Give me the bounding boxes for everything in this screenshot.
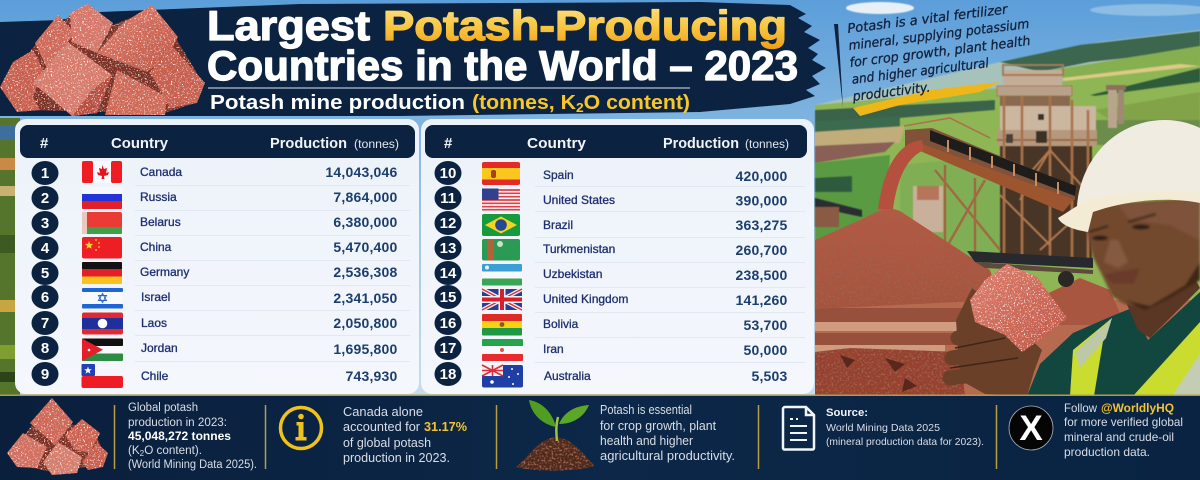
row 2 Russia: 7,864,000 (333, 189, 398, 205)
row 7 Laos: Laos (141, 316, 167, 330)
row 4 China: China (140, 240, 172, 254)
row 15 United Kingdom: United Kingdom (543, 292, 628, 306)
text: global production: production in 2023: (128, 417, 227, 429)
callout: potash description (834, 0, 1036, 116)
row 8 Jordan: 1,695,800 (333, 341, 398, 357)
text: potash essential: agricultural productivity. (600, 449, 735, 463)
row 15 United Kingdom: 141,260 (735, 292, 788, 308)
row 4 China: 4 (41, 240, 50, 257)
processing plant tower (997, 65, 1126, 262)
row 6 Israel (32, 285, 398, 309)
text: source (826, 407, 984, 448)
row 13 Turkmenistan: 260,700 (735, 242, 788, 258)
row 10 Spain: 420,000 (735, 168, 788, 184)
text: source: Source: (826, 407, 868, 419)
row 10 Spain (434, 161, 788, 185)
row 4 China: 5,470,400 (333, 239, 398, 255)
potash rock held in hand (970, 264, 1067, 352)
row 11 United States: United States (543, 193, 615, 207)
farmland strip left of the table (0, 118, 20, 398)
row 12 Brazil: 12 (440, 215, 456, 232)
icon: potash rock pile in header (0, 4, 205, 116)
subtitle: 2 (576, 100, 584, 115)
text: source: (mineral production data for 2023). (826, 436, 984, 448)
row 12 Brazil: 363,275 (735, 217, 788, 233)
row 15 United Kingdom: 15 (440, 289, 456, 306)
row 5 Germany: Germany (140, 265, 189, 279)
row 6 Israel: 6 (41, 289, 49, 306)
row 5 Germany (32, 261, 398, 285)
row 17 Iran (434, 336, 788, 361)
title (207, 2, 798, 89)
row 13 Turkmenistan: 13 (440, 240, 456, 257)
icon: seedling in soil (516, 400, 595, 471)
text: Canada share: 31.17% (424, 419, 467, 434)
text: potash essential: Potash is essential (600, 403, 692, 417)
row 10 Spain: Spain (543, 168, 574, 182)
icon: source document (783, 407, 814, 450)
worker hand (950, 288, 1042, 396)
left table header: # (40, 135, 49, 152)
row 15 United Kingdom (434, 285, 788, 310)
row 14 Uzbekistan (434, 261, 788, 286)
row 10 Spain: 10 (440, 165, 456, 182)
text: global production (128, 402, 257, 471)
row 8 Jordan: 8 (41, 340, 49, 357)
row 12 Brazil: Brazil (543, 218, 573, 232)
text: global production: O content). (144, 445, 202, 457)
right table header: Country (527, 135, 587, 152)
row 7 Laos: 2,050,800 (333, 315, 398, 331)
row 18 Australia: 5,503 (751, 368, 788, 384)
panel: left table (15, 119, 419, 394)
text: potash essential: for crop growth, plant (600, 419, 717, 433)
row 8 Jordan (32, 336, 398, 361)
text: global production: Global potash (128, 402, 198, 414)
left table header: Country (111, 135, 169, 152)
text: global production: 2 (140, 449, 145, 458)
row 16 Bolivia: 53,700 (743, 317, 788, 333)
title: Potash-Producing (383, 2, 787, 49)
subtitle: O content) (584, 92, 690, 114)
text: follow: Follow (1064, 401, 1097, 415)
row 16 Bolivia: 16 (440, 315, 456, 332)
worker face (1086, 198, 1200, 310)
text: global production: 45,048,272 tonnes (128, 431, 231, 443)
text: Canada share: production in 2023. (343, 450, 450, 465)
text: Canada share: Canada alone (343, 404, 423, 419)
row 16 Bolivia (434, 311, 788, 336)
row 5 Germany: 5 (41, 265, 49, 282)
row 3 Belarus: 6,380,000 (333, 214, 398, 230)
text: global production: (World Mining Data 2025). (128, 459, 257, 471)
worker shirt (1027, 292, 1200, 396)
subtitle: Potash mine production (210, 92, 465, 114)
panel: footer bar (0, 394, 1200, 480)
text: follow: for more verified global (1064, 415, 1183, 429)
title: Largest (207, 2, 370, 49)
worker hi-vis vest (1070, 318, 1200, 396)
row 6 Israel: 2,341,050 (333, 290, 398, 306)
row 4 China (32, 236, 398, 260)
row 3 Belarus: 3 (41, 215, 49, 232)
row 9 Chile: 9 (41, 366, 49, 383)
inclined conveyor belt (904, 118, 1076, 262)
subtitle (208, 88, 690, 115)
icon: X logo (1009, 406, 1053, 450)
text: source: World Mining Data 2025 (826, 422, 940, 434)
text: follow: mineral and crude-oil (1064, 430, 1174, 444)
text: follow (1064, 401, 1183, 459)
row 7 Laos (32, 311, 398, 335)
row 11 United States: 390,000 (735, 192, 788, 208)
right table header: Production (663, 135, 739, 152)
row 16 Bolivia: Bolivia (543, 317, 579, 331)
row 18 Australia: 18 (440, 366, 456, 383)
text: potash essential (600, 403, 735, 463)
icon: potash rocks (7, 398, 108, 475)
row 13 Turkmenistan (434, 236, 788, 260)
row 1 Canada: 1 (41, 165, 49, 182)
row 14 Uzbekistan: 238,500 (735, 267, 788, 283)
row 18 Australia (434, 362, 788, 388)
icon: X logo: X (1019, 409, 1043, 448)
row 17 Iran: 50,000 (743, 342, 788, 358)
row 3 Belarus (32, 211, 398, 235)
right table header (425, 125, 807, 158)
right table header: # (444, 135, 453, 152)
subtitle: (tonnes, K (472, 92, 570, 114)
horizontal conveyor and wheel (967, 251, 1093, 287)
row 6 Israel: Israel (141, 290, 170, 304)
row 14 Uzbekistan: Uzbekistan (543, 267, 602, 281)
row 5 Germany: 2,536,308 (333, 264, 398, 280)
text: global production: (K (128, 445, 140, 457)
left table header: Production (270, 135, 347, 152)
row 12 Brazil (434, 211, 788, 236)
row 3 Belarus: Belarus (140, 215, 181, 229)
worker neck (1125, 270, 1200, 338)
right table header: (tonnes) (745, 139, 789, 151)
row 11 United States (434, 186, 788, 210)
row 2 Russia: Russia (140, 190, 177, 204)
panel: right table (421, 119, 814, 394)
row 1 Canada (32, 161, 398, 185)
text: potash essential: health and higher (600, 434, 693, 448)
row 8 Jordan: Jordan (141, 341, 178, 355)
row 17 Iran: 17 (440, 340, 456, 357)
row 2 Russia (32, 186, 398, 210)
callout: potash description: mineral, supplying potassium (848, 17, 1030, 54)
worker hard hat (1058, 120, 1200, 232)
title banner: brush stroke (0, 2, 826, 116)
text: Canada share: accounted for (343, 419, 421, 434)
ground and red pile (815, 207, 1200, 396)
text: follow: @WorldlyHQ (1101, 401, 1174, 415)
icon: info (280, 408, 322, 448)
row 2 Russia: 2 (41, 190, 49, 207)
row 1 Canada: 14,043,046 (325, 164, 398, 180)
row 9 Chile (32, 362, 398, 388)
text: follow: production data. (1064, 445, 1150, 459)
row 1 Canada: Canada (140, 165, 182, 179)
falling potash stream (878, 140, 924, 209)
row 13 Turkmenistan: Turkmenistan (543, 242, 615, 256)
row 17 Iran: Iran (543, 342, 564, 356)
callout: potash description: Potash is a vital fertilizer (847, 2, 1010, 37)
title: Countries in the World – 2023 (207, 42, 798, 89)
text: Canada share: of global potash (343, 435, 431, 450)
callout: potash description: productivity. (851, 80, 931, 105)
row 9 Chile: 743,930 (345, 368, 398, 384)
callout: potash description: and higher agricultural (851, 56, 990, 88)
row 11 United States: 11 (440, 190, 456, 207)
row 14 Uzbekistan: 14 (440, 265, 457, 282)
row 18 Australia: Australia (544, 369, 591, 383)
row 7 Laos: 7 (41, 315, 49, 332)
left table header: (tonnes) (354, 139, 399, 151)
left table header (20, 125, 415, 158)
small tower and conveyor behind the pile (815, 186, 943, 232)
worker (950, 120, 1200, 396)
text: Canada share (343, 404, 467, 465)
callout: potash description: for crop growth, plant health (849, 34, 1031, 71)
row 9 Chile: Chile (141, 369, 169, 383)
